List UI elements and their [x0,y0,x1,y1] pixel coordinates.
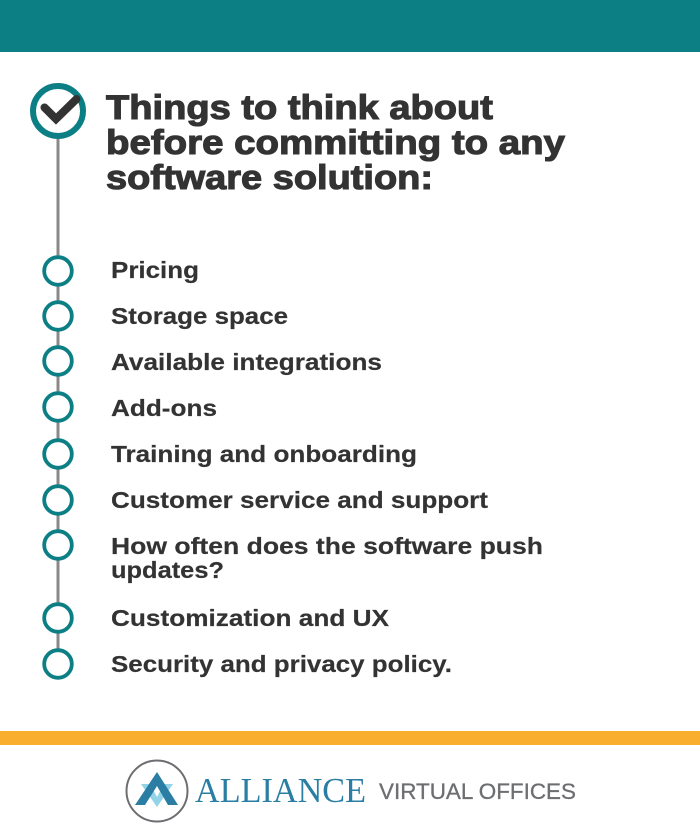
checklist text: Add-ons [111,395,217,421]
checklist text: Customization and UX [111,605,389,631]
checklist text: updates? [111,557,224,583]
checklist text [111,257,543,677]
checklist text: Customer service and support [111,487,488,513]
checklist text: Security and privacy policy. [111,651,452,677]
icon: large check circle [33,86,83,136]
timeline line [56,135,60,665]
timeline circles [44,257,72,678]
checklist text: Storage space [111,303,288,329]
checklist text: Training and onboarding [111,441,417,467]
title: Things to think about [106,89,493,127]
title: before committing to any [106,124,565,162]
logo tagline: VIRTUAL OFFICES [379,779,576,804]
checklist text: Pricing [111,257,199,283]
icon: logo emblem [126,760,188,822]
checklist text: How often does the software push [111,533,543,559]
top teal band [0,0,700,52]
logo wordmark: ALLIANCE [195,771,366,810]
title [106,89,565,197]
title: software solution: [106,159,433,197]
logo [126,760,576,822]
checklist text: Available integrations [111,349,382,375]
orange divider band [0,731,700,745]
